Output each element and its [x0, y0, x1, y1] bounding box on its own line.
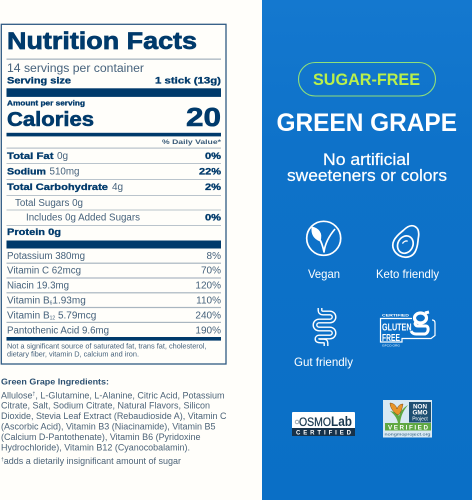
- logo: certified gluten free: CERTIFIED: [382, 312, 409, 318]
- thick divider: [6, 88, 221, 97]
- rows: vitamins and minerals: Niacin 19.3mg: [7, 281, 69, 292]
- rows: vitamins and minerals: 240%: [195, 310, 221, 321]
- ingredients text block: Citrate, Salt, Sodium Citrate, Natural Flavors, Silicon: [1, 401, 210, 411]
- rows: vitamins and minerals: 1.93mg: [52, 295, 86, 306]
- logo: Non-GMO Project verified: nongmoproject.org: [384, 432, 430, 436]
- ingredients text block: [1, 377, 227, 466]
- rows: vitamins and minerals: Potassium 380mg: [7, 251, 85, 262]
- ingredients text block: †: [33, 391, 36, 397]
- servings row: 14 servings per container: [7, 63, 144, 75]
- icon: vegan: [307, 221, 341, 255]
- logo: certified gluten free: GLUTEN: [382, 322, 412, 334]
- ingredients text block: (Ascorbic Acid), Vitamin B3 (Niacinamide), Vitamin B5: [1, 422, 216, 432]
- footnote: Not a significant source of saturated fat, trans fat, cholesterol,: [7, 343, 207, 350]
- thick divider: [6, 337, 221, 341]
- logo: OsmoLab certified: OSMO: [299, 417, 331, 429]
- calories block: % Daily Value*: [162, 139, 222, 146]
- ingredients text block: Allulose: [1, 390, 33, 400]
- logo: OsmoLab certified: CERTIFIED: [296, 430, 352, 436]
- ingredients text block: , L-Glutamine, L-Alanine, Citric Acid, Potassium: [35, 390, 224, 400]
- logo: certified gluten free: [380, 312, 435, 348]
- rows: macronutrients: [6, 151, 221, 237]
- rows: vitamins and minerals: 120%: [195, 281, 221, 292]
- rows: vitamins and minerals: 12: [50, 315, 55, 321]
- rows: macronutrients: 22%: [199, 166, 221, 176]
- rows: macronutrients: Total Carbohydrate: [7, 182, 108, 192]
- heading: Nutrition Facts: Nutrition Facts: [7, 28, 197, 55]
- subheading: No artificial: [323, 151, 410, 169]
- rows: macronutrients: Total Fat: [7, 151, 54, 161]
- thick divider: [6, 240, 221, 248]
- ingredients text block: Hydrochloride), Vitamin B12 (Cyanocobalamin).: [1, 442, 190, 452]
- rows: macronutrients: 0%: [205, 151, 221, 161]
- label: keto friendly: Keto friendly: [376, 267, 439, 281]
- rows: vitamins and minerals: Vitamin B: [7, 295, 50, 306]
- servings row: Serving size: [7, 75, 71, 85]
- servings row: 1 stick (13g): [155, 75, 221, 85]
- label: vegan: Vegan: [308, 267, 340, 281]
- logo: OsmoLab certified: [292, 412, 355, 436]
- logo: Non-GMO Project verified: VERIFIED: [388, 424, 428, 432]
- logo: certified gluten free: FREE: [382, 333, 400, 344]
- rows: macronutrients: Protein 0g: [7, 227, 61, 237]
- ingredients text block: †: [1, 457, 4, 463]
- footnote: dietary fiber, vitamin D, calcium and iron.: [7, 352, 139, 359]
- rows: vitamins and minerals: [6, 251, 221, 336]
- logo: Non-GMO Project verified: GMO: [412, 410, 428, 416]
- panel: blue product claims: [262, 0, 472, 500]
- calories block: [6, 100, 222, 149]
- calories block: 20: [186, 102, 221, 132]
- rows: vitamins and minerals: 8%: [207, 251, 221, 262]
- logo: OsmoLab certified: Lab: [331, 413, 352, 429]
- logo: Non-GMO Project verified: Project: [412, 416, 428, 422]
- footnote: [7, 343, 207, 359]
- logo: certified gluten free: GFCO.ORG: [382, 344, 401, 348]
- ingredients text block: Green Grape Ingredients:: [1, 377, 109, 387]
- calories block: Calories: [7, 109, 94, 131]
- rows: vitamins and minerals: Vitamin C 62mcg: [7, 266, 81, 277]
- ingredients text block: (Calcium D-Pantothenate), Vitamin B6 (Pyridoxine: [1, 432, 200, 442]
- badge: sugar-free pill: [298, 62, 436, 96]
- rows: vitamins and minerals: 110%: [196, 295, 221, 306]
- rows: vitamins and minerals: 70%: [201, 266, 221, 277]
- icon: keto avocado: [389, 221, 426, 261]
- icon: gut: [315, 307, 334, 347]
- heading: Green Grape: GREEN GRAPE: [276, 110, 457, 137]
- subheading: [287, 151, 447, 185]
- rows: macronutrients: Total Sugars 0g: [15, 198, 83, 209]
- label: gut friendly: Gut friendly: [294, 355, 353, 369]
- badge: sugar-free pill: SUGAR-FREE: [313, 70, 420, 89]
- rows: macronutrients: Sodium: [7, 166, 46, 176]
- servings row: [6, 58, 221, 85]
- subheading: sweeteners or colors: [287, 167, 447, 185]
- rows: vitamins and minerals: Vitamin B: [7, 310, 50, 321]
- rows: macronutrients: 0%: [205, 212, 221, 222]
- rows: macronutrients: 510mg: [50, 166, 80, 178]
- rows: macronutrients: 0g: [57, 151, 68, 162]
- logo: Non-GMO Project verified: NON: [413, 404, 427, 410]
- rows: vitamins and minerals: 190%: [195, 325, 221, 336]
- rows: vitamins and minerals: 5.79mcg: [55, 310, 96, 321]
- rows: macronutrients: 2%: [205, 182, 221, 192]
- rows: macronutrients: Includes 0g Added Sugars: [26, 212, 140, 223]
- rows: vitamins and minerals: 6: [50, 300, 53, 306]
- logo: Non-GMO Project verified: [383, 400, 432, 438]
- rows: macronutrients: 4g: [112, 182, 123, 193]
- calories block: Amount per serving: [7, 100, 85, 108]
- ingredients text block: adds a dietarily insignificant amount of sugar: [4, 456, 181, 466]
- panel: nutrition facts label: [1, 24, 226, 364]
- ingredients text block: Dioxide, Stevia Leaf Extract (Rebaudioside A), Vitamin C: [1, 411, 227, 421]
- rows: vitamins and minerals: Pantothenic Acid 9.6mg: [7, 325, 109, 336]
